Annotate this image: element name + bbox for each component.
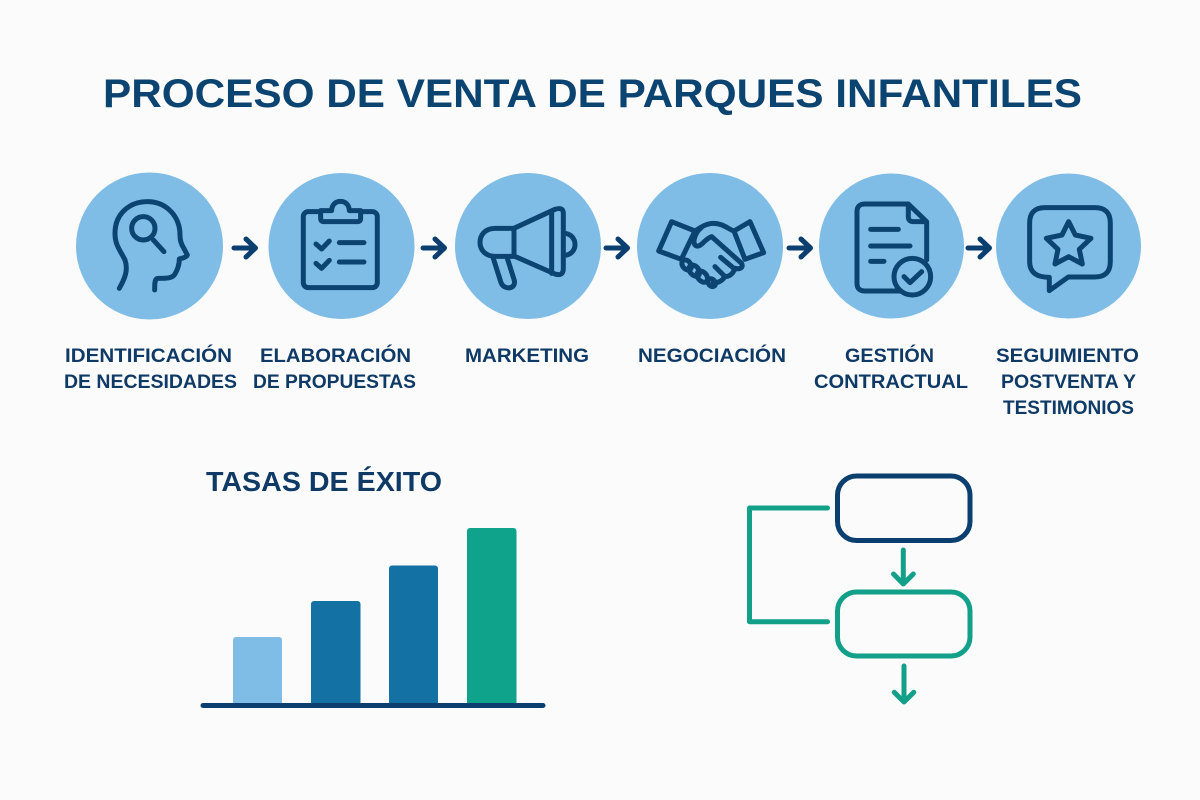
step 5 label: [814, 343, 968, 393]
step 6 label: POSTVENTA Y: [1001, 371, 1136, 393]
panel: step 2 elaboración de propuestas: [253, 173, 416, 393]
icon: head with magnifier: [115, 202, 187, 290]
flow diagram: [750, 476, 970, 702]
step 4 circle: [637, 173, 783, 319]
feedback bracket: [750, 508, 828, 622]
step 3 circle: [455, 173, 601, 319]
step 6 label: TESTIMONIOS: [1003, 397, 1134, 419]
arrow 4 to 5: [789, 239, 810, 257]
arrow 2 to 3: [423, 239, 444, 257]
step 2 circle: [268, 173, 414, 319]
flow box top: [838, 476, 970, 540]
arrow 5 to 6: [968, 239, 990, 257]
step 2 label: ELABORACIÓN: [260, 343, 411, 367]
step 3 label: MARKETING: [465, 345, 589, 367]
icon: speech bubble with star: [1030, 208, 1110, 291]
step 1 label: IDENTIFICACIÓN: [65, 343, 232, 367]
step 1 circle: [76, 172, 223, 320]
arrow out of bottom box: [894, 666, 914, 702]
panel: step 5 gestión contractual: [814, 174, 968, 393]
step 2 label: [253, 343, 416, 393]
step 2 label: DE PROPUESTAS: [253, 371, 416, 393]
title: PROCESO DE VENTA DE PARQUES INFANTILES: [103, 72, 1082, 116]
panel: step 4 negociación: [637, 173, 786, 367]
step 1 label: DE NECESIDADES: [64, 371, 237, 393]
step 6 circle: [996, 174, 1141, 318]
panel: step 1 identificación de necesidades: [64, 172, 237, 393]
step 6 label: SEGUIMIENTO: [996, 345, 1139, 367]
step 4 label: NEGOCIACIÓN: [638, 343, 786, 367]
arrow 1 to 2: [234, 239, 256, 257]
icon: contract document: [857, 204, 931, 295]
arrow 3 to 4: [606, 239, 628, 257]
icon: handshake: [659, 222, 764, 288]
step 5 circle: [819, 174, 964, 318]
arrow between boxes: [894, 550, 913, 584]
icon: clipboard checklist: [303, 201, 377, 288]
flow box bottom: [838, 592, 970, 656]
icon: megaphone: [480, 209, 575, 288]
step 5 label: CONTRACTUAL: [814, 371, 968, 393]
chart heading: TASAS DE ÉXITO: [206, 466, 442, 497]
step 1 label: [64, 343, 237, 393]
panel: step 3 marketing: [455, 173, 601, 367]
panel: step 6 seguimiento postventa y testimonios: [996, 174, 1141, 419]
bar chart: [203, 528, 543, 707]
step 5 label: GESTIÓN: [845, 343, 934, 367]
step 6 label: [996, 345, 1139, 419]
